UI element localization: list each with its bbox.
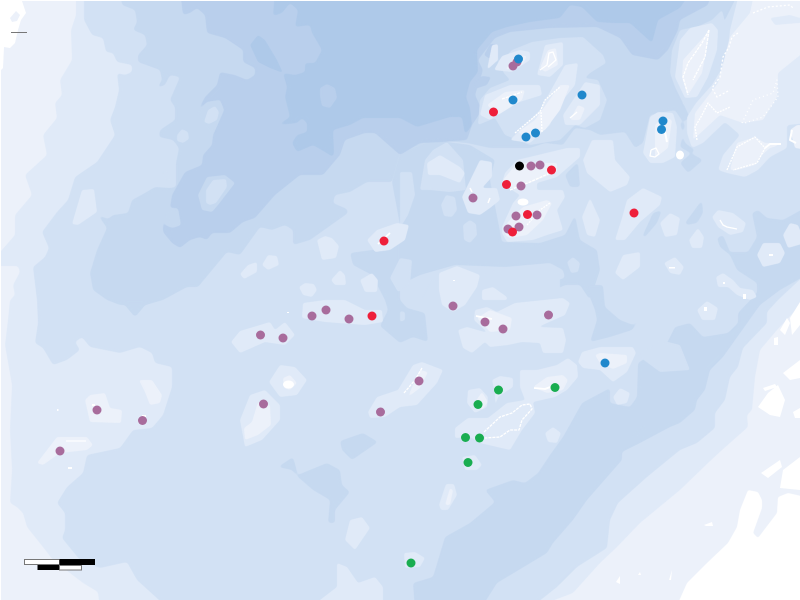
blobs: d2 knolls bbox=[160, 10, 725, 372]
land: north-west coast bbox=[1, 1, 26, 70]
band: north-east shallows bbox=[687, 0, 800, 177]
markers: green sites bbox=[406, 383, 560, 568]
markers: purple sites bbox=[56, 58, 553, 456]
marker: black site bbox=[515, 162, 524, 170]
band: deep c6 south-east trough bbox=[413, 205, 800, 600]
land: eastern islands bbox=[57, 150, 800, 584]
land: south-east coast bbox=[675, 490, 800, 600]
coastlines: island outlines bbox=[378, 5, 796, 438]
markers: blue sites bbox=[508, 54, 668, 368]
blobs: lighter knolls in the deep water bbox=[320, 44, 497, 108]
patch: deepest ae west bbox=[250, 36, 282, 72]
band: deep c6 north and west bbox=[90, 0, 740, 317]
band: deepest ae bbox=[273, 0, 692, 157]
band: deep c6 central basin bbox=[385, 140, 600, 300]
markers: red sites bbox=[368, 108, 638, 320]
blob: eastern shoal island 1 bbox=[675, 23, 718, 98]
scale bar bbox=[24, 559, 95, 570]
band: deep b9 bbox=[163, 0, 712, 248]
leader line bbox=[11, 32, 27, 33]
band: north-east channel bbox=[772, 16, 800, 24]
blobs: c6 knolls bbox=[198, 176, 234, 212]
band: deep c6 small patches bbox=[281, 164, 702, 523]
